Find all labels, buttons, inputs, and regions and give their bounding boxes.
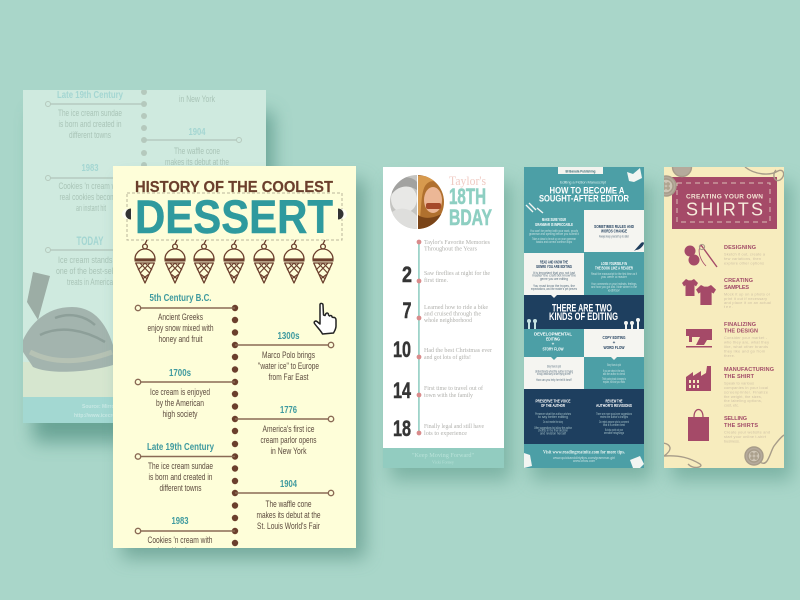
age 10: 10 <box>393 337 411 362</box>
entry: 1776: America's first ice <box>262 424 314 435</box>
entry: 1300s: 1300s <box>278 330 300 342</box>
tip: reader: Read the manuscript for the first time as if <box>591 272 637 276</box>
banner: two kinds of editing: THERE ARE TWO <box>552 302 612 314</box>
icon: white sticks <box>526 203 543 213</box>
section: navy advice: and revision herself <box>540 432 566 436</box>
tip: rules <box>584 210 644 252</box>
step: finalizing: THE DESIGN <box>724 328 758 334</box>
tip: reader: and how you got lost. Note where in the <box>591 285 637 289</box>
column: copy editing: explain, not lost your edits <box>603 380 625 384</box>
column: developmental editing: Understands what the author is trying <box>535 370 573 374</box>
age 2 <box>402 262 490 287</box>
entry: 5th century: 5th Century B.C. <box>150 292 212 304</box>
faded timeline text: Late 19th Century <box>57 89 123 101</box>
tip: genre: It is important that you not just <box>533 271 575 275</box>
column: copy editing: ask the author to check <box>603 372 625 376</box>
step: designing: DESIGNING <box>724 245 756 251</box>
age 18: Finally legal and still have <box>424 424 484 430</box>
photo circle <box>390 175 445 230</box>
icon: factory <box>686 366 711 391</box>
tip: grammar: You can't be perfect with your work, proofs <box>530 229 578 233</box>
age 2: 2 <box>402 262 412 287</box>
timeline intro: Throughout the Years <box>424 246 478 252</box>
age 2: first time. <box>424 277 448 284</box>
section: navy advice: sensible misgivings <box>604 431 624 435</box>
footer: visit site: Visit www.readingreatnite.com for more tips. <box>543 450 626 456</box>
heading: history of the coolest: HISTORY OF THE COOLEST <box>135 179 333 196</box>
tip: reader: editor <box>608 288 621 292</box>
tip: rules: WORDS CHANGE <box>601 228 627 234</box>
entry: late 19th century: Late 19th Century <box>147 441 214 453</box>
entry: 1776: in New York <box>270 446 307 457</box>
step: selling: Create your website and <box>724 430 770 434</box>
banner: two kinds of editing: KINDS OF EDITING <box>549 311 618 323</box>
column: copy editing: Think using track changes to <box>602 377 626 381</box>
section: navy advice: Preserve what the author wishes <box>535 412 571 416</box>
icons: ice cream cones <box>134 240 334 283</box>
title block: HOW TO BECOME A <box>550 186 625 196</box>
step: designing: explore other options <box>724 262 764 266</box>
column: copy editing <box>584 329 644 384</box>
age 18 <box>393 416 484 441</box>
step: creating samples: Mock it up on a photo or <box>724 292 771 296</box>
entry: 5th century: Ancient Greeks <box>158 312 203 323</box>
entry: late 19th century: is born and created in <box>148 472 212 483</box>
section: navy advice: But also point out your <box>605 428 624 432</box>
banner: CREATING YOUR OWN <box>686 194 763 200</box>
faded timeline text: makes its debut at the <box>165 157 229 168</box>
age 7: whole neighborhood <box>424 318 472 324</box>
faded timeline text: is born and created in <box>58 119 122 130</box>
faded ice cream photo <box>23 272 113 397</box>
entry: 1904: makes its debut at the <box>256 510 320 521</box>
age 18: lots to experience <box>424 431 467 437</box>
step: designing <box>724 245 766 266</box>
section: navy advice: There are more good-ever suggestions <box>596 412 632 416</box>
tip: reader: LOSE YOURSELF IN <box>601 261 627 266</box>
icon: book <box>627 168 642 182</box>
footer band: "Keep Moving Forward" <box>412 453 475 459</box>
faded timeline text: in New York <box>179 94 215 105</box>
entry: 1300s <box>258 330 319 383</box>
column: developmental editing: STORY FLOW <box>542 346 564 352</box>
column: copy editing: Story flows to plot <box>607 363 621 367</box>
footer band <box>383 448 504 468</box>
heading: Taylor's: Taylor's <box>449 174 486 188</box>
tip: genre: You must know the tropes, the <box>533 284 575 288</box>
step: manufacturing: the labeling options, <box>724 399 762 403</box>
faded timeline text: different towns <box>69 130 111 141</box>
heading: 18TH BDAY <box>449 184 492 230</box>
faded timeline text: The ice cream sundae <box>58 108 122 119</box>
faded source band: Source: Mirror <box>82 404 117 410</box>
age 18: 18 <box>393 416 411 441</box>
entry: 1700s <box>150 367 210 420</box>
faded timeline text <box>56 89 229 288</box>
title block <box>539 180 629 204</box>
column: copy editing: COPY EDITING <box>602 335 626 340</box>
age 14: 14 <box>393 378 412 403</box>
faded timeline <box>46 89 242 252</box>
timeline intro <box>424 240 491 252</box>
entry: 5th century: enjoy snow mixed with <box>148 323 214 334</box>
panel: history of the coolest dessert <box>113 166 365 558</box>
tip: genre: expectations, and the reader's pet peeves <box>531 287 577 291</box>
faded timeline text: The waffle cone <box>174 146 220 157</box>
entry: late 19th century <box>147 441 214 494</box>
step: finalizing <box>724 322 769 358</box>
faded timeline text: treats in America <box>67 277 113 288</box>
age 14: First time to travel out of <box>424 385 483 392</box>
step: selling: SELLING <box>724 416 747 422</box>
entry: 1776 <box>260 404 317 457</box>
entry: late 19th century: different towns <box>160 483 202 494</box>
section: navy advice: review the author's changes <box>600 415 628 419</box>
publisher tab: BI Barada Publishing <box>566 168 596 174</box>
tip: grammar: MAKE SURE YOUR <box>542 217 567 222</box>
step: selling: business. <box>724 440 740 444</box>
entry: 1983: Cookies 'n cream with <box>148 535 212 546</box>
column: copy editing: + <box>613 340 616 345</box>
age 7: Learned how to ride a bike <box>424 305 488 311</box>
faded timeline text: Cookies 'n cream with <box>58 181 124 192</box>
entry: 1700s: 1700s <box>169 367 191 379</box>
step: creating samples: and place it on an actual <box>724 301 771 305</box>
step: manufacturing: screenprinter. Finalize <box>724 390 768 394</box>
entry: 1700s: high society <box>162 409 198 420</box>
timeline intro: Taylor's Favorite Memories <box>424 240 491 246</box>
step: creating samples: CREATING <box>724 278 753 284</box>
column: developmental editing: How can you help her tell it best? <box>536 378 572 382</box>
column: developmental editing: to say, what story is she trying to tell? <box>537 372 571 376</box>
step: creating samples: tee. <box>724 305 733 309</box>
entry: 1983: real cookies becomes <box>148 546 212 557</box>
tip: rules: SOMETIMES RULES AND <box>594 224 634 229</box>
footer: visit site: www.quickanddirtytips.com/grammar-girl <box>553 456 615 460</box>
entry: 1300s: from Far East <box>268 372 309 383</box>
age 2: Saw fireflies at night for the <box>424 270 490 277</box>
banner: SHIRTS <box>686 200 763 220</box>
entry: 1983 <box>148 517 212 548</box>
entry: late 19th century: The ice cream sundae <box>148 461 213 472</box>
tip: genre <box>524 253 584 295</box>
faded timeline text: an instant hit <box>76 203 106 214</box>
section: navy advice <box>524 389 644 444</box>
step: finalizing: FINALIZING <box>724 322 756 328</box>
column: developmental editing <box>524 332 584 389</box>
icon: shopping bag <box>688 410 709 441</box>
step: finalizing: they like and go from <box>724 350 765 354</box>
step: creating samples: SAMPLES <box>724 285 749 291</box>
step: manufacturing: Speak to various <box>724 382 754 386</box>
faded timeline text: TODAY <box>76 236 104 248</box>
title block: Editing a Fiction Manuscript <box>560 180 607 184</box>
step: manufacturing: MANUFACTURING <box>724 367 774 373</box>
section: navy advice: Do reject anyone who's comment <box>599 420 629 424</box>
banner: two kinds of editing <box>524 295 644 329</box>
tip: rules: Always keep yourself up to date! <box>599 234 629 238</box>
entry: 1776: 1776 <box>280 404 297 416</box>
tip: reader: Your comments on your instincts, feelings, <box>591 282 637 286</box>
section: navy advice: choices in the final decision <box>538 428 568 432</box>
step: manufacturing <box>724 367 774 408</box>
icon: shirts <box>682 279 716 305</box>
step: creating samples: print it out if necessary <box>724 297 767 301</box>
tip: grammar <box>529 217 579 244</box>
entry: 5th century <box>148 292 214 345</box>
step: creating samples <box>724 278 771 309</box>
icon: needle and buttons <box>684 244 717 267</box>
entry: 1300s: "water ice" to Europe <box>258 361 319 372</box>
entry: 1983: 1983 <box>172 515 189 527</box>
step: finalizing: who they are, what they <box>724 340 769 344</box>
entry: 1300s: Marco Polo brings <box>262 350 315 361</box>
step: designing: few variations, then <box>724 257 761 261</box>
age 14 <box>393 378 483 403</box>
tip: genre: GENRE YOU ARE EDITING <box>536 264 572 269</box>
age 7: 7 <box>402 298 412 323</box>
thread and buttons decoration <box>656 158 784 467</box>
publisher tab <box>558 167 603 174</box>
panel: faded back infographic <box>23 89 273 442</box>
step: manufacturing: THE SHIRT <box>724 374 755 380</box>
selection box <box>122 193 347 240</box>
column: developmental editing: DEVELOPMENTAL <box>534 332 572 336</box>
column: copy editing: WORD FLOW <box>604 345 625 350</box>
entry: 1904: The waffle cone <box>266 499 312 510</box>
step: manufacturing: companies in your local <box>724 386 768 390</box>
faded timeline text: one of the best-selling <box>56 266 124 277</box>
faded timeline text: Ice cream stands as <box>58 255 122 266</box>
entry: 1700s: by the American <box>156 398 204 409</box>
tip: genre: genre you are editing <box>540 277 568 281</box>
panel: Taylor's 18th bday <box>383 167 511 480</box>
tip: reader: THE BOOK LIKE A READER <box>595 266 634 270</box>
tip: reader <box>591 261 637 292</box>
entry: 1776: cream parlor opens <box>260 435 317 446</box>
banner <box>672 177 777 229</box>
section: navy advice: to say better editing <box>538 415 568 419</box>
icon: sewing machine <box>686 329 712 348</box>
step: manufacturing: the weight, the sizes, <box>724 395 762 399</box>
section: navy advice: PRESERVE THE VOICE <box>536 398 571 404</box>
timeline spine <box>232 305 238 546</box>
age 10 <box>393 337 492 362</box>
panel: how to become an editor <box>524 167 652 480</box>
heading: 18TH BDAY: 18TH <box>449 184 486 209</box>
age 14: town with the family <box>424 392 473 399</box>
icon: hand cursor <box>314 303 336 334</box>
age 7: and cruised through the <box>424 312 481 318</box>
heading: dessert: DESSERT <box>135 190 333 243</box>
entry: 1700s: Ice cream is enjoyed <box>150 387 210 398</box>
column: developmental editing: + <box>552 342 555 346</box>
entry: 1904: St. Louis World's Fair <box>257 521 320 532</box>
panel: creating your own shirts <box>656 158 792 480</box>
section: navy advice: that it is written best <box>603 423 625 427</box>
faded source band <box>23 397 113 423</box>
step: manufacturing: cost, etc. <box>724 404 739 408</box>
section: navy advice: AUTHOR'S REVISIONS <box>596 403 632 408</box>
column: developmental editing: EDITING <box>546 336 560 342</box>
step: selling <box>724 416 770 444</box>
entry: 5th century: honey and fruit <box>158 334 203 345</box>
section: navy advice: REVIEW THE <box>606 398 623 404</box>
age 10: and got lots of gifts! <box>424 354 471 361</box>
tip: grammar: GRAMMAR IS IMPECCABLE <box>535 222 573 227</box>
step: finalizing: Consider your market - <box>724 336 768 340</box>
section: navy advice: Offer suggestions but allow the author <box>534 426 573 430</box>
section: navy advice: Do not rewrite the story <box>543 420 563 424</box>
timeline line <box>417 240 421 435</box>
column: developmental editing: Story flows to plot <box>547 364 561 368</box>
footer: visit site: www.cmos.com <box>573 459 595 463</box>
tip: grammar: basics and correct common slips <box>536 240 572 244</box>
step: finalizing: like, what other brands <box>724 345 768 349</box>
entry: 1904 <box>256 478 320 532</box>
entry: 1904: 1904 <box>280 478 297 490</box>
footer band: Vicki Forney <box>432 460 454 464</box>
step: finalizing: there. <box>724 354 735 358</box>
heading: 18TH BDAY: BDAY <box>449 205 492 230</box>
faded source band: http://www.icecream.org <box>74 413 132 419</box>
faded timeline text: real cookies becomes <box>60 192 123 203</box>
footer: visit site <box>524 450 644 468</box>
tip: grammar: grammar and spelling before you submit it <box>529 232 579 236</box>
faded timeline text: 1904 <box>188 126 206 138</box>
timeline branches <box>135 305 334 534</box>
tip: genre: READ AND KNOW THE <box>540 260 568 264</box>
faded timeline text: 1983 <box>82 162 99 174</box>
step: selling: THE SHIRTS <box>724 423 758 429</box>
tip: grammar: Take a class to brush up on your grammar <box>532 237 577 241</box>
section: navy advice: OF THE AUTHOR <box>541 403 566 408</box>
step: selling: start your online t-shirt <box>724 435 767 439</box>
title block: SOUGHT-AFTER EDITOR <box>539 194 629 204</box>
column: copy editing: If you are clean in the work, <box>603 369 625 373</box>
step: designing: Sketch it out, create a <box>724 252 766 256</box>
age 7 <box>402 298 488 324</box>
tip: genre: master the craft but know the <box>532 274 576 278</box>
tip: reader: you were a reader <box>601 275 628 279</box>
age 10: Had the best Christmas ever <box>424 348 492 354</box>
